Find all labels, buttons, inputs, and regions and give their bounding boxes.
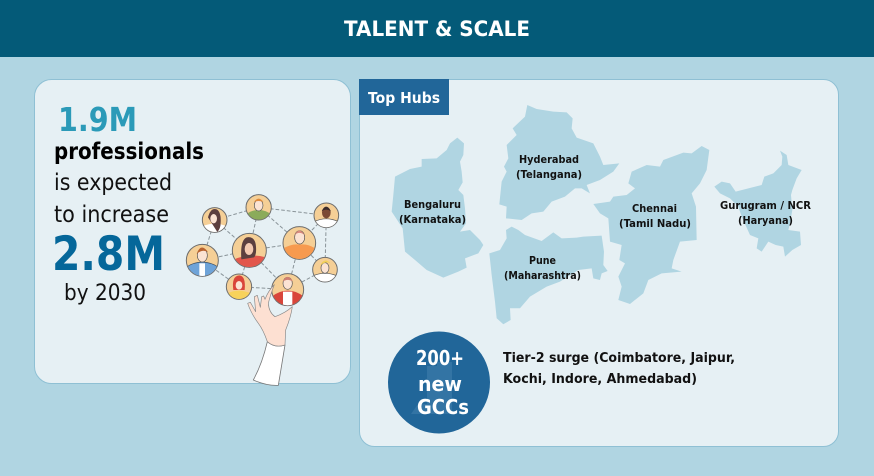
person: green shirt <box>246 195 271 220</box>
person: blue jacket <box>186 244 218 276</box>
title: TALENT & SCALE <box>344 17 530 41</box>
tab label: Top Hubs <box>368 89 440 107</box>
person: red jacket <box>272 274 304 306</box>
label: Pune <box>529 255 556 267</box>
label: Bengaluru <box>404 199 461 211</box>
panel: top hubs <box>359 79 838 446</box>
person: orange shirt <box>283 227 316 259</box>
map: Gurugram / NCR, Haryana <box>714 151 811 257</box>
tab: Top Hubs <box>359 79 449 115</box>
label: Chennai <box>632 203 677 215</box>
map: Pune, Maharashtra <box>489 227 608 324</box>
badge: 200+ new GCCs <box>388 332 490 434</box>
network connections <box>202 207 326 290</box>
text: professionals: professionals <box>54 137 204 165</box>
map: Hyderabad, Telangana <box>499 105 619 220</box>
person: yellow top <box>226 274 252 299</box>
icon: building watermark <box>411 362 452 414</box>
person: woman in white <box>202 208 227 232</box>
stat: 1.9M: 1.9M <box>58 100 137 139</box>
stat: 2.8M: 2.8M <box>52 227 165 282</box>
person: dark hair <box>314 203 339 228</box>
sublabel: (Telangana) <box>516 169 582 181</box>
badge line 3: GCCs <box>417 395 469 419</box>
person: blonde <box>313 257 337 282</box>
label: Gurugram / NCR <box>720 200 811 212</box>
sublabel: (Maharashtra) <box>504 270 581 282</box>
panel: workforce growth <box>34 80 350 385</box>
sublabel: (Tamil Nadu) <box>619 218 691 230</box>
header bar <box>0 0 874 57</box>
text: tier-2 surge line 1: Tier-2 surge (Coimbatore, Jaipur, <box>503 350 735 366</box>
badge line 1: 200+ <box>416 346 464 370</box>
person: woman in red <box>232 233 266 267</box>
icon: shirt cuff <box>253 342 285 385</box>
text: by 2030: by 2030 <box>64 280 146 306</box>
badge line 2: new <box>418 372 462 396</box>
sublabel: (Haryana) <box>738 215 793 227</box>
illustration: hand and cuff <box>248 285 292 385</box>
map: Chennai, Tamil Nadu <box>593 146 709 304</box>
text: is expected: is expected <box>54 168 172 196</box>
label: Hyderabad <box>519 154 579 166</box>
map: Bengaluru, Karnataka <box>392 138 483 278</box>
text: tier-2 surge line 2: Kochi, Indore, Ahmedabad) <box>503 371 697 387</box>
sublabel: (Karnataka) <box>399 214 466 226</box>
text: to increase: to increase <box>54 200 169 228</box>
icon: hand <box>248 285 292 346</box>
illustration: people network <box>186 195 339 306</box>
